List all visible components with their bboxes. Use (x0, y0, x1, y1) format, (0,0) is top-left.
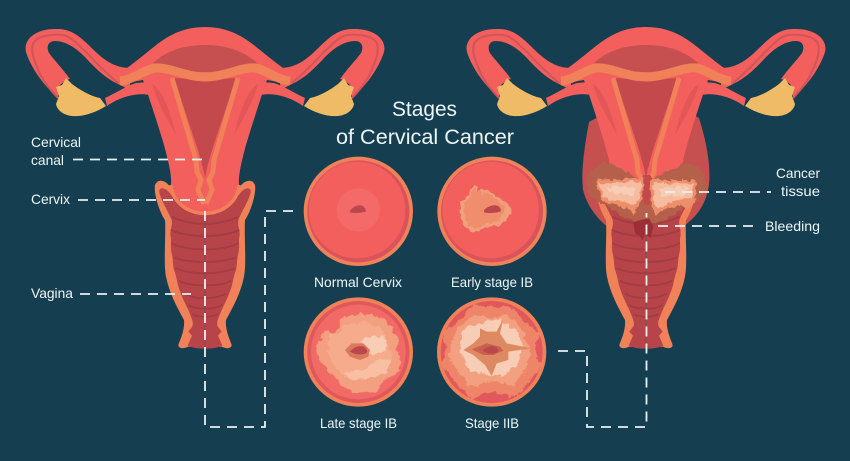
bleeding (633, 218, 653, 241)
circle: stage IIB (437, 297, 546, 407)
circle: early stage IB (437, 157, 547, 266)
circle captions: Late stage IB (320, 415, 397, 431)
right labels: Cancer (776, 165, 820, 181)
left labels: Cervix (31, 191, 70, 207)
circle captions: Normal Cervix (314, 274, 402, 290)
title: Stages (392, 98, 457, 121)
left diagram: healthy reproductive organs (26, 27, 384, 349)
circle: normal cervix (304, 157, 413, 266)
dashed leader lines (73, 160, 771, 427)
left labels: Cervical (31, 134, 81, 150)
tumour tissue and bleeding on right diagram (587, 163, 707, 241)
title (336, 98, 514, 149)
left labels (31, 134, 81, 301)
title: of Cervical Cancer (336, 126, 514, 149)
right labels: Bleeding (765, 218, 820, 234)
right diagram: organs with cancer (467, 27, 825, 349)
left labels: canal (31, 152, 64, 168)
right labels: tissue (781, 183, 820, 199)
circle captions (314, 274, 533, 431)
left labels: Vagina (31, 285, 73, 301)
circle captions: Stage IIB (465, 415, 519, 431)
circle captions: Early stage IB (451, 274, 533, 290)
circle: late stage IB (304, 297, 413, 407)
right labels (765, 165, 820, 234)
swollen body behind organ (582, 90, 709, 228)
